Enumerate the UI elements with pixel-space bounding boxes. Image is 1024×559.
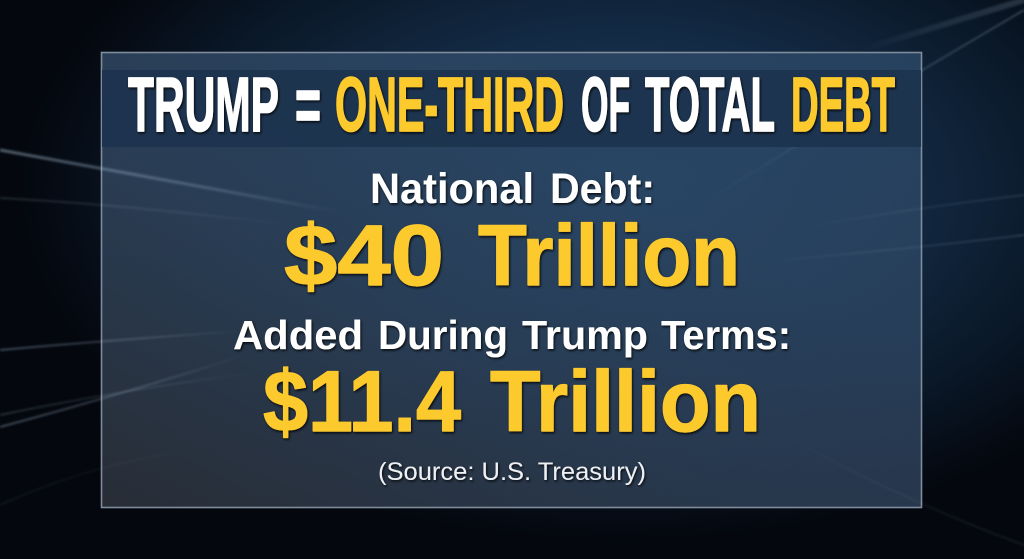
value: $40 trillion: $40 <box>284 208 444 304</box>
label: national debt: Debt: <box>550 165 655 213</box>
source note: (Source: U.S. Treasury) <box>378 458 646 486</box>
value: $40 trillion <box>284 208 740 304</box>
value: $11.4 trillion <box>263 354 761 450</box>
panel: glass card <box>102 52 922 508</box>
label: added during trump terms: Terms: <box>661 312 791 358</box>
title: OF <box>581 62 630 148</box>
title <box>128 62 895 148</box>
title: ONE-THIRD <box>335 62 564 148</box>
value: $11.4 trillion: $11.4 <box>263 354 461 450</box>
label: national debt: National <box>370 165 534 213</box>
title: = <box>295 62 321 148</box>
infographic canvas: DEBT <box>791 62 895 148</box>
title: TOTAL <box>645 62 775 148</box>
value: $40 trillion: Trillion <box>478 208 740 304</box>
label: added during trump terms <box>233 312 791 358</box>
label: added during trump terms: During <box>378 312 508 358</box>
title: TRUMP <box>128 62 279 148</box>
label: national debt <box>370 165 655 213</box>
label: added during trump terms: Added <box>233 312 363 358</box>
value: $11.4 trillion: Trillion <box>490 354 761 450</box>
header band <box>102 70 921 147</box>
label: added during trump terms: Trump <box>522 312 648 358</box>
